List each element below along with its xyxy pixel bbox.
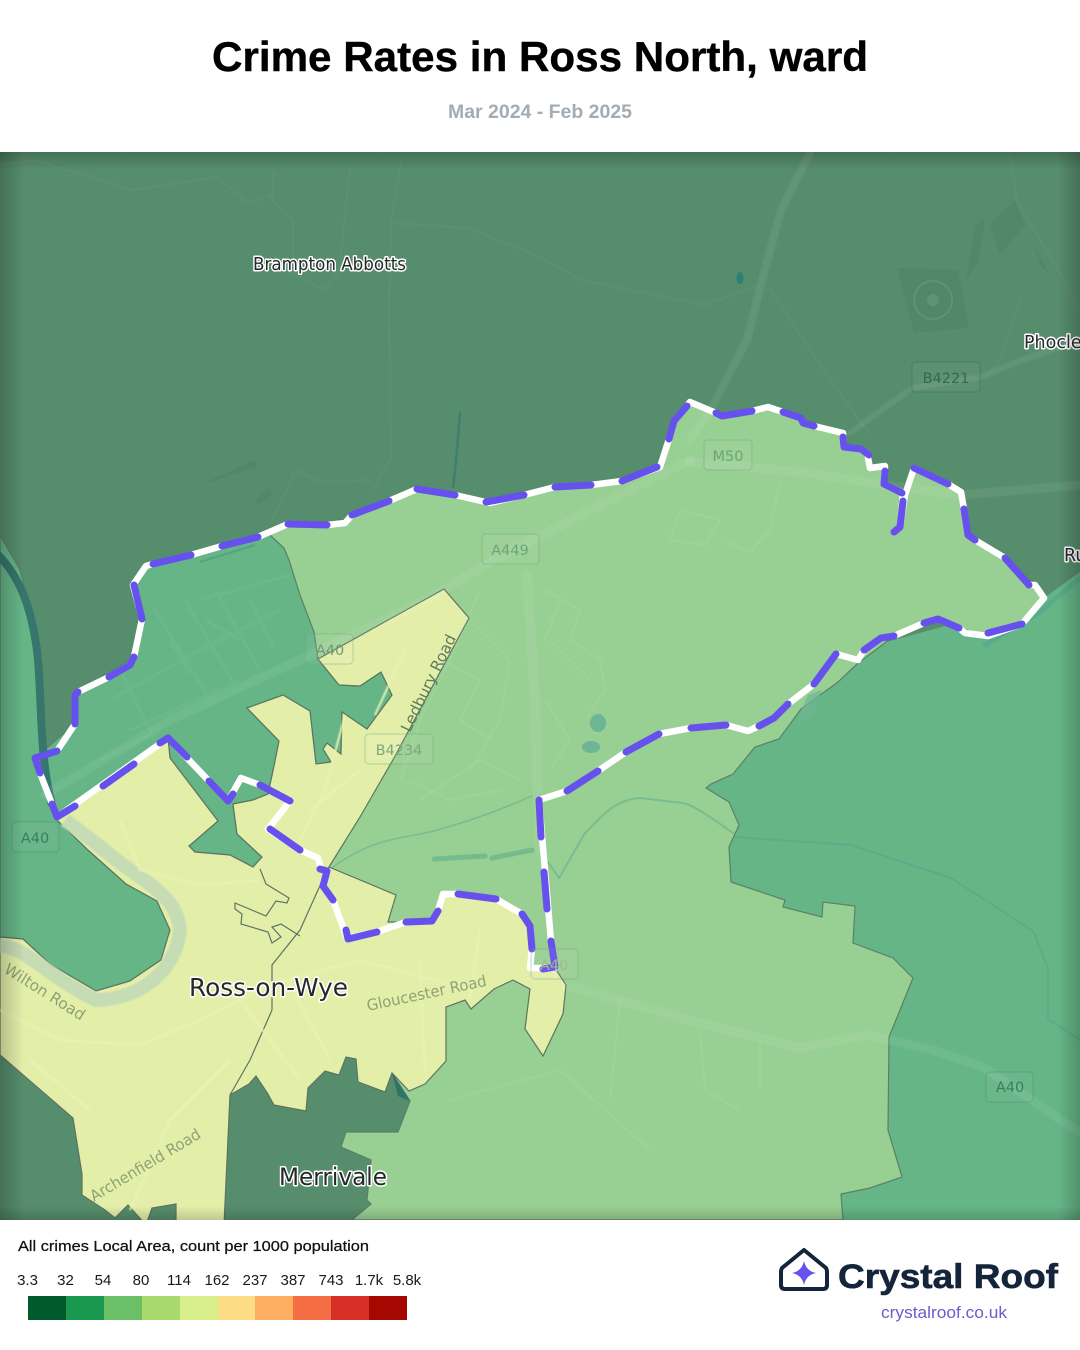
road badge: M50	[704, 440, 752, 470]
legend title: All crimes Local Area, count per 1000 population	[18, 1238, 369, 1255]
legend scale values: 54	[95, 1272, 111, 1289]
ward boundary: white line	[35, 402, 1044, 968]
circular field feature	[897, 268, 969, 333]
choropleth base: lowest crime band	[0, 152, 1080, 1220]
ward boundary: purple dashes	[35, 406, 1029, 969]
wordmark: Crystal Roof	[838, 1258, 1059, 1296]
brand logo	[781, 1250, 1059, 1322]
streets: town	[0, 650, 480, 1210]
river: dark channel in the west	[0, 552, 52, 805]
road badge: B4234: B4234	[376, 743, 422, 759]
road badge: A40 north	[306, 634, 353, 664]
road name: Wilton Road: Wilton Road	[1, 960, 88, 1024]
map panel	[0, 152, 1080, 1225]
legend scale values: 743	[318, 1272, 344, 1289]
ponds	[582, 690, 822, 753]
streets: central estates	[444, 616, 476, 768]
boundary lines inside the town	[230, 867, 329, 1095]
watercourses	[333, 413, 1080, 1040]
legend scale values: 1.7k	[355, 1272, 384, 1289]
place label: Brampton Abbotts: Brampton Abbotts	[253, 255, 406, 275]
legend scale values: 5.8k	[393, 1272, 422, 1289]
region: north-west ward medium green area	[35, 535, 392, 867]
road badge: A40 centre: A40	[540, 958, 568, 974]
road name: Gloucester Road: Gloucester Road	[365, 972, 488, 1015]
road name: Archenfield Road: Archenfield Road	[87, 1125, 204, 1205]
legend	[17, 1238, 422, 1320]
road badge: A40 west	[12, 822, 59, 852]
pond in the north	[736, 272, 744, 284]
legend scale values: 387	[280, 1272, 306, 1289]
website url: crystalroof.co.uk	[881, 1304, 1008, 1322]
teal line along ward north edge	[200, 520, 345, 562]
road badge: B4234	[365, 734, 433, 764]
region: western medium green area	[0, 535, 170, 991]
road badge: A40 north: A40	[316, 643, 344, 659]
subtitle: date range: Mar 2024 - Feb 2025	[448, 102, 632, 123]
legend scale values: 80	[133, 1272, 149, 1289]
road badge: M50: M50	[713, 449, 743, 465]
road badge: A449: A449	[491, 543, 529, 559]
road badge: B4221	[912, 362, 980, 392]
legend scale values: 237	[242, 1272, 268, 1289]
legend scale values: 162	[204, 1272, 230, 1289]
woodland patches	[200, 200, 1060, 506]
place label: Phocle: Phocle	[1024, 333, 1080, 353]
icon: house with star	[781, 1250, 827, 1289]
road badge: A449	[482, 534, 539, 564]
road badge: B4221: B4221	[923, 371, 969, 387]
legend scale values: 114	[167, 1272, 191, 1289]
place label: Ross-on-Wye: Ross-on-Wye	[189, 973, 348, 1002]
region: south-east medium green area	[700, 572, 1080, 1220]
region: yellow town area	[0, 589, 566, 1225]
road badge: A40 east: A40	[996, 1080, 1024, 1096]
legend colour ramp	[28, 1296, 407, 1320]
legend scale values: 32	[57, 1272, 74, 1289]
place label: Merrivale: Merrivale	[279, 1163, 387, 1191]
map edge vignette	[0, 152, 1080, 1220]
main roads	[45, 153, 1080, 1133]
teal sliver near Merrivale	[392, 1073, 410, 1101]
road badge: A40 west: A40	[21, 831, 49, 847]
region: central light green area	[270, 402, 1044, 1220]
streets: north-west estate	[100, 575, 290, 760]
road badge: A40 east	[986, 1072, 1033, 1102]
road badge: A40 centre	[531, 949, 578, 979]
legend scale values	[17, 1272, 422, 1289]
legend scale values: 3.3	[17, 1272, 38, 1289]
title: Crime Rates in Ross North, ward	[212, 33, 868, 80]
river: pale band around the loop	[0, 820, 180, 1000]
minor lanes	[272, 195, 273, 196]
road name: Ledbury Road: Ledbury Road	[397, 632, 460, 735]
